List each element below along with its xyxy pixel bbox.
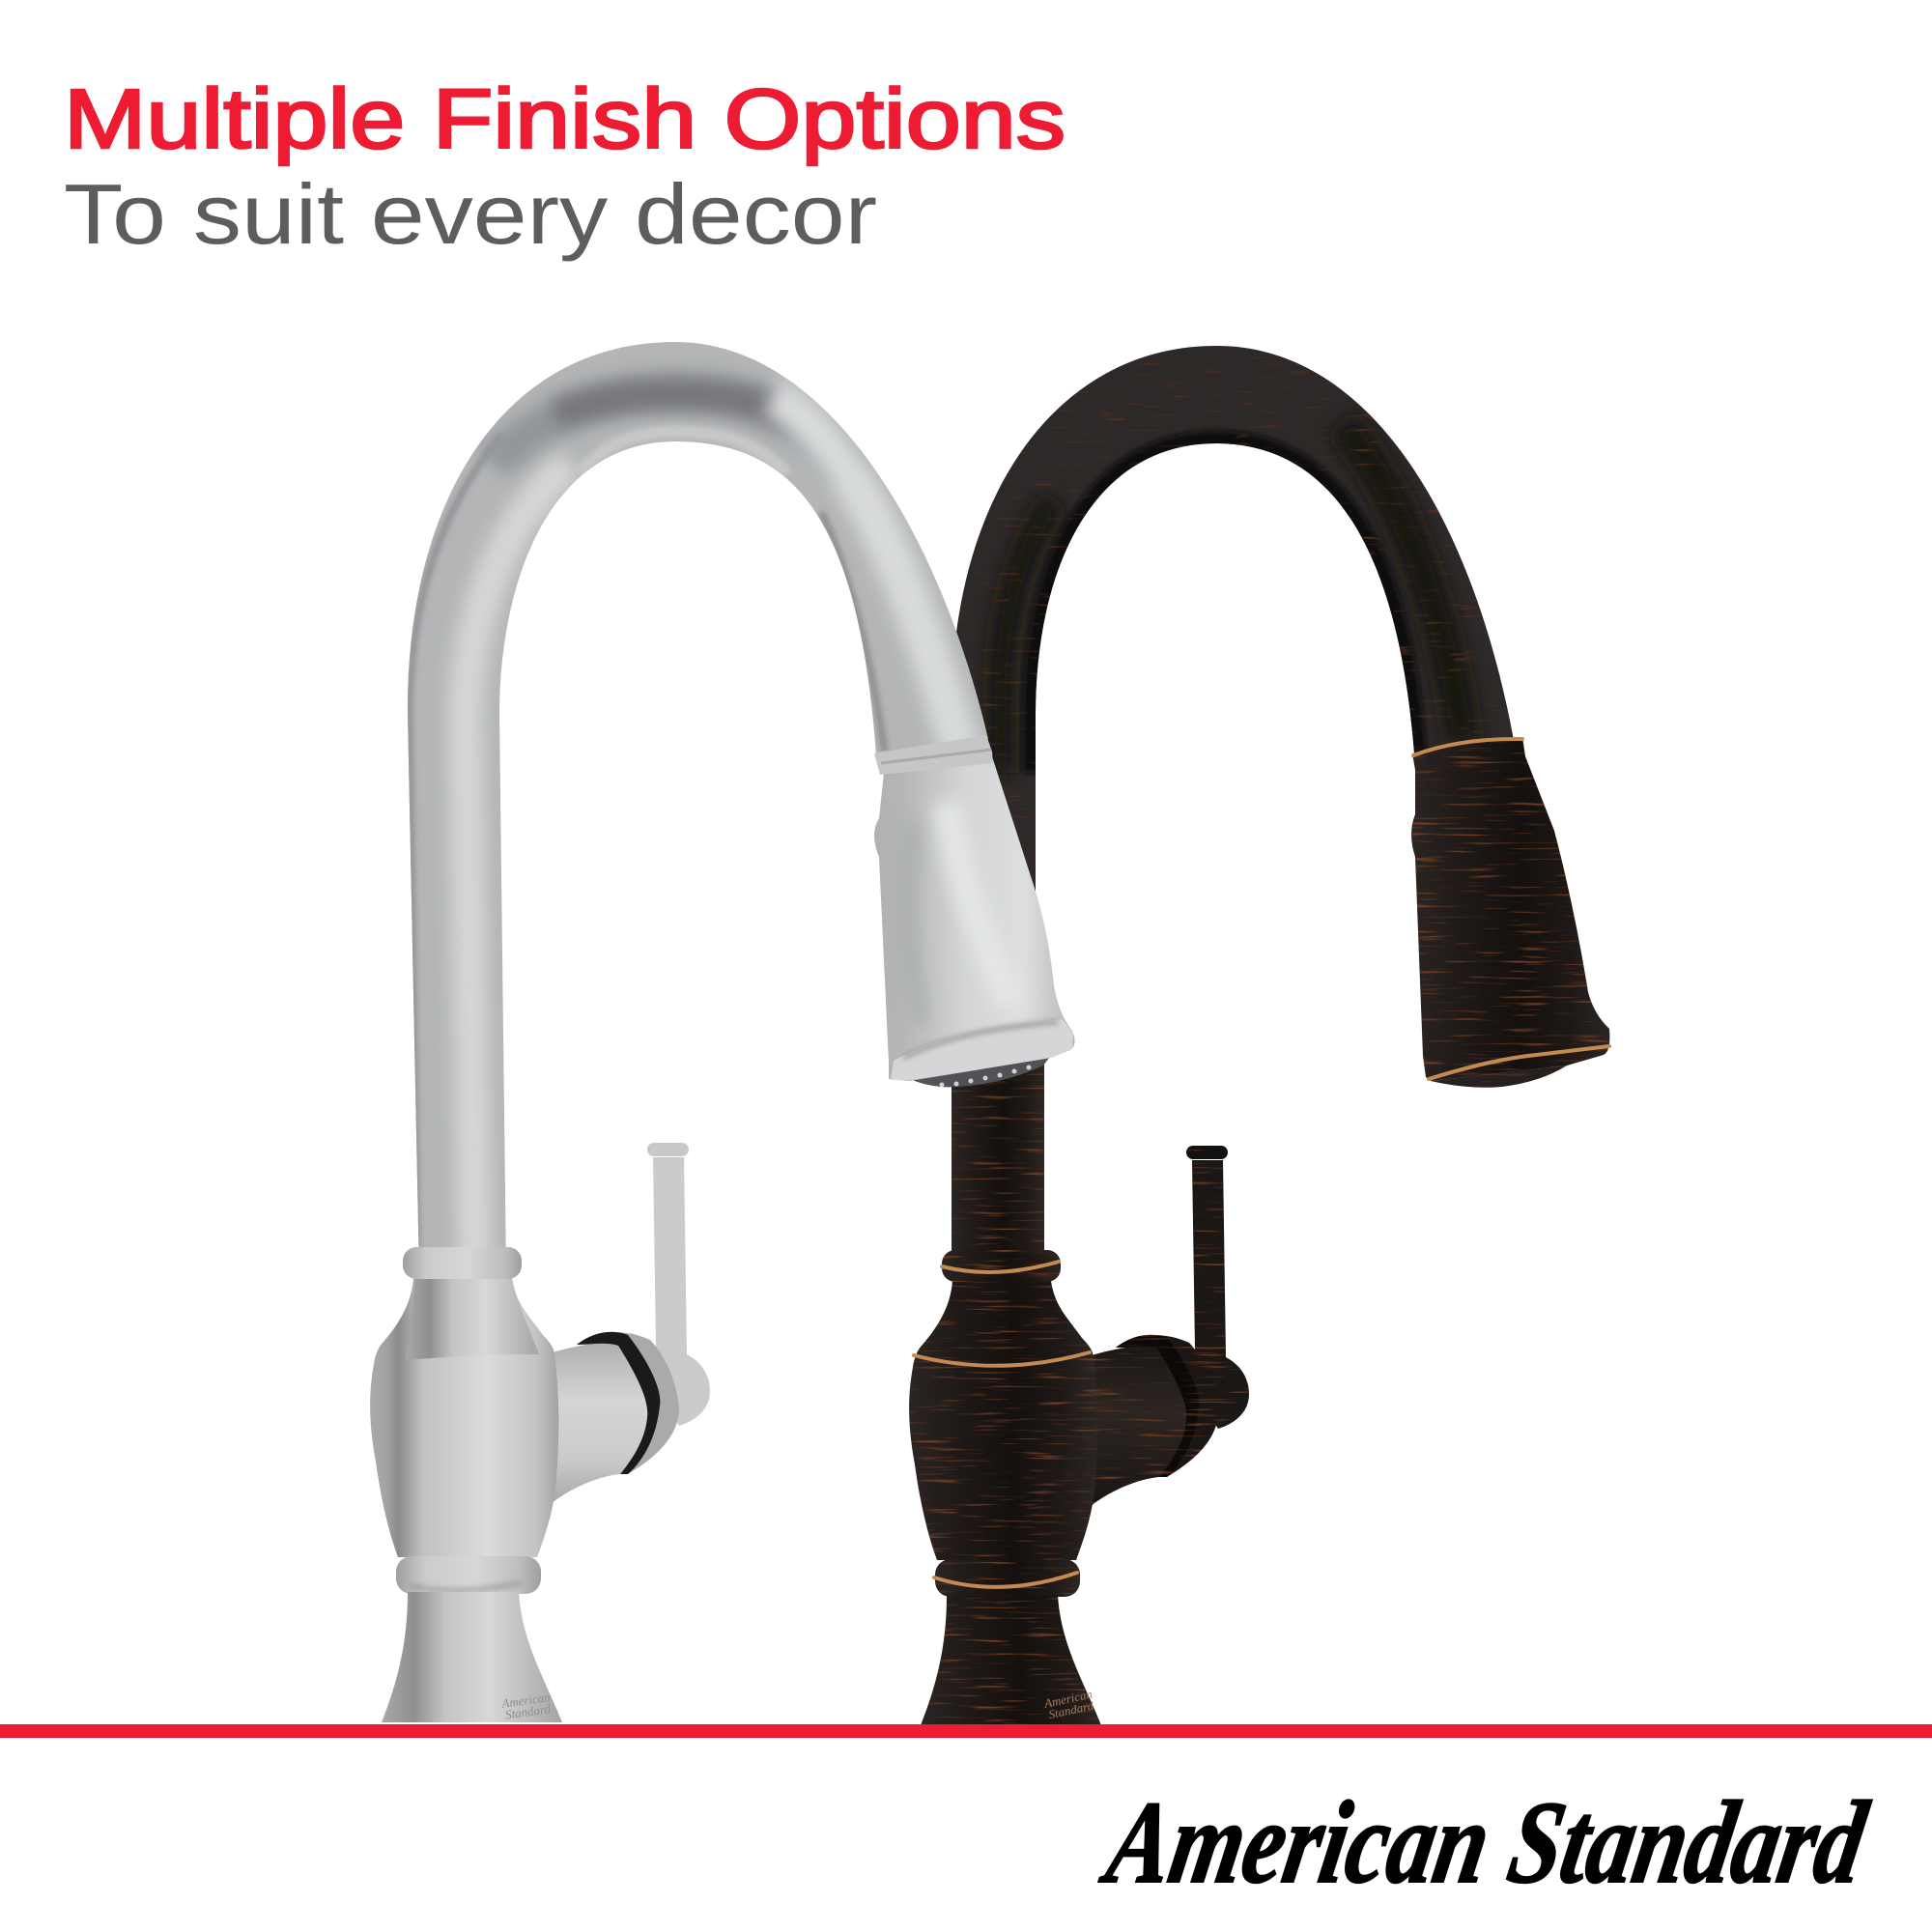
steel base tiny brand mark: Standard	[504, 1701, 552, 1722]
bronze spout tube	[956, 346, 1513, 891]
bronze lower stem	[952, 1053, 1044, 1275]
bronze copper trim lines	[914, 739, 1609, 1587]
bronze base tiny brand mark: American	[1043, 1687, 1094, 1711]
faucet: oil rubbed bronze finish	[909, 328, 1609, 1725]
heading: Multiple Finish Options: Multiple Finish Options	[64, 72, 1065, 166]
steel base body	[370, 1247, 562, 1722]
bronze base tiny brand mark: Standard	[1047, 1698, 1095, 1721]
steel pull-down spray head	[874, 735, 1075, 1088]
faucet: brushed stainless steel finish	[370, 328, 1075, 1722]
bronze lower stem, spray head and base with brushed texture	[909, 737, 1609, 1725]
bronze base body	[909, 1250, 1101, 1725]
red horizontal rule	[0, 1724, 1932, 1738]
steel handle	[531, 1143, 710, 1507]
steel base tiny brand mark: American	[500, 1690, 551, 1711]
steel spray nozzle dots	[939, 1065, 1032, 1088]
steel spout tube	[408, 342, 988, 1247]
subheading: To suit every decor: To suit every decor	[64, 166, 877, 262]
bronze pull-down spray head	[1411, 737, 1609, 1088]
bronze handle	[1070, 1146, 1249, 1510]
